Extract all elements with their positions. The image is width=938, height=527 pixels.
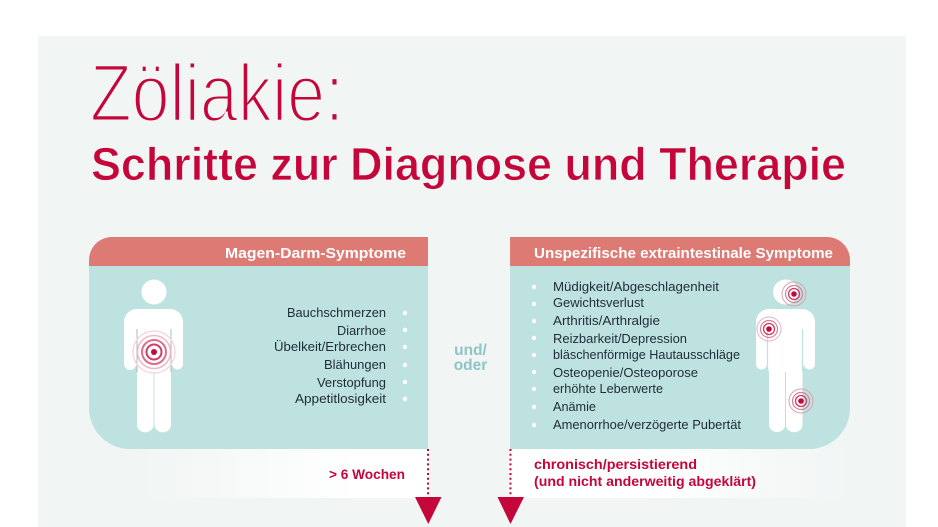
panel body right [510, 266, 850, 449]
symptom list right: erhöhte Leberwerte [553, 382, 663, 396]
symptom list left: Verstopfung [317, 376, 386, 390]
symptom list right: bläschenförmige Hautausschläge [553, 348, 740, 362]
subtitle: Schritte zur Diagnose und Therapie [91, 138, 846, 190]
duration band right [510, 449, 850, 498]
duration label: > 6 Wochen [329, 466, 405, 482]
panel: Unspezifische extraintestinale Symptome [510, 237, 850, 449]
panel body left [89, 266, 428, 449]
heading right: Unspezifische extraintestinale Symptome [534, 245, 833, 262]
symptom list right: Anämie [553, 400, 596, 414]
duration note right: (und nicht anderweitig abgeklärt) [534, 473, 756, 489]
symptom list left: Blähungen [324, 358, 386, 372]
title: Zöliakie: [90, 48, 344, 139]
connector text: und/ [454, 342, 487, 359]
symptom list right [532, 280, 741, 432]
symptom list right: Reizbarkeit/Depression [553, 332, 687, 346]
symptom list right: Amenorrhoe/verzögerte Pubertät [553, 418, 741, 432]
duration label right: chronisch/persistierend [534, 456, 697, 472]
duration band left [140, 449, 428, 498]
arrow right [498, 449, 524, 524]
symptom list left: Diarrhoe [337, 324, 386, 338]
heading left: Magen-Darm-Symptome [225, 245, 406, 262]
symptom list right: Gewichtsverlust [553, 296, 644, 310]
icon: body with pain points [756, 280, 815, 432]
symptom list right: Osteopenie/Osteoporose [553, 366, 698, 380]
symptom list left: Übelkeit/Erbrechen [274, 340, 386, 354]
symptom list left [274, 306, 407, 406]
arrow left [415, 449, 442, 524]
symptom list left: Appetitlosigkeit [295, 392, 386, 406]
symptom list right: Arthritis/Arthralgie [553, 314, 660, 328]
icon: body with abdominal pain [124, 280, 183, 432]
symptom list right: Müdigkeit/Abgeschlagenheit [553, 280, 719, 294]
connector text: oder [454, 357, 487, 374]
panel header left [89, 237, 428, 266]
panel header right [510, 237, 850, 266]
symptom list left: Bauchschmerzen [287, 306, 386, 320]
panel: Magen-Darm-Symptome [89, 237, 428, 449]
